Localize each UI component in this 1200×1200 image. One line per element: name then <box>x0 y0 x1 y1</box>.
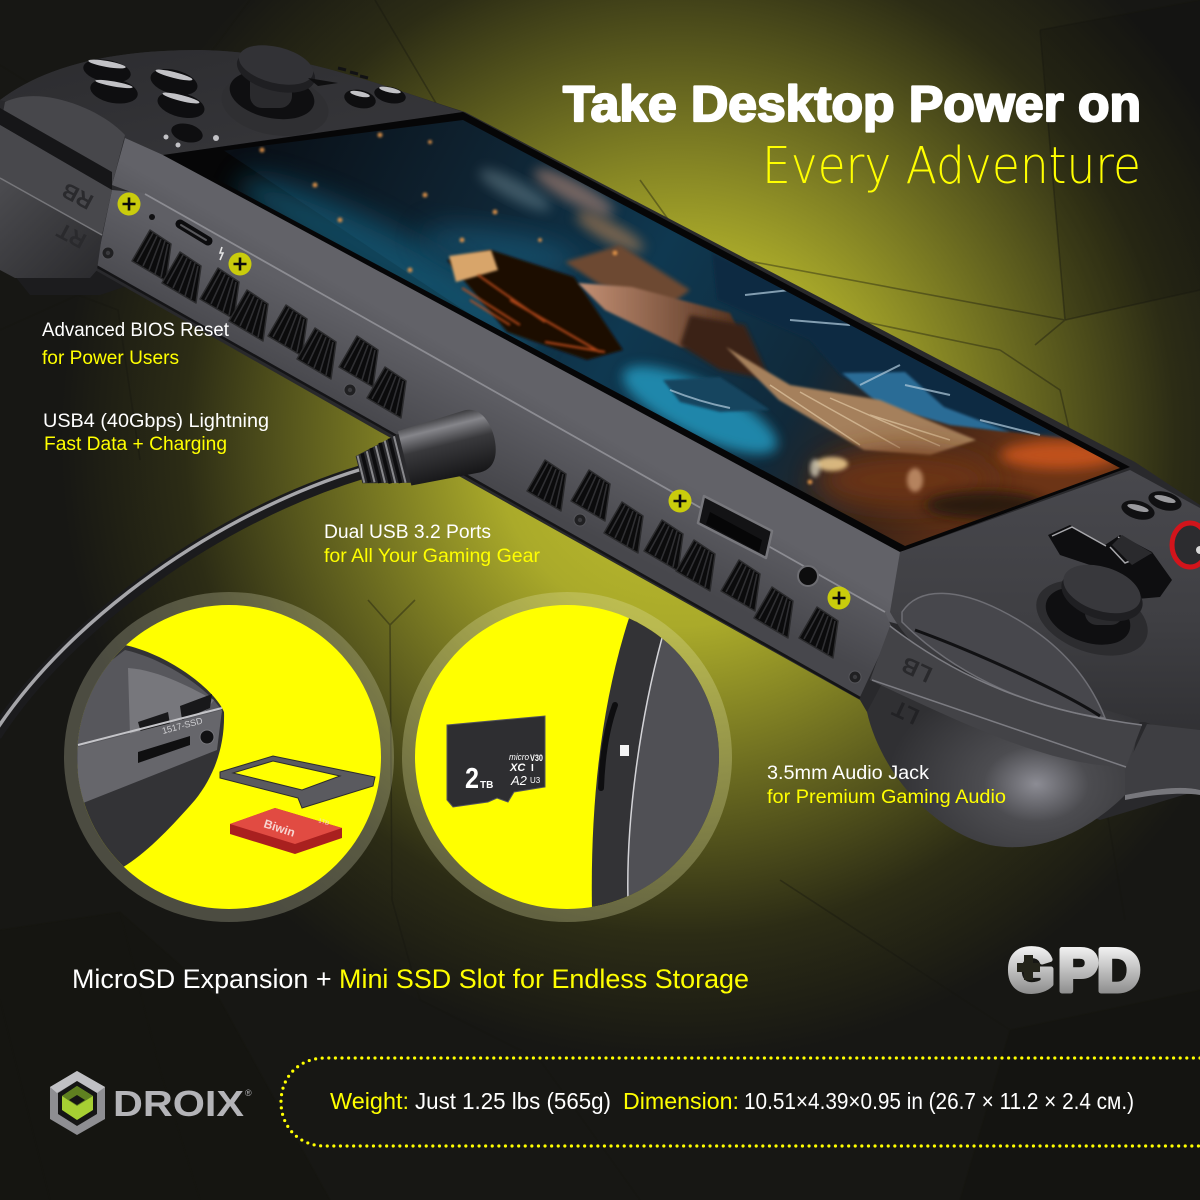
red SSD card: Biwin <box>262 817 297 840</box>
GPD logo <box>1008 937 1140 1004</box>
metal top band <box>112 138 960 640</box>
helmet / dark armour block <box>447 250 623 360</box>
microSD card: micro <box>509 752 529 762</box>
screen bezel <box>163 112 1130 552</box>
label: dual USB <box>324 522 541 567</box>
top face with left grip <box>0 50 463 155</box>
storage headline: MicroSD Expansion + Mini SSD Slot for Endless Storage <box>72 964 749 994</box>
LB bumper bar <box>870 626 1142 767</box>
right grip controls <box>1026 488 1200 670</box>
circle: mini SSD slot <box>60 592 394 922</box>
circle: microSD slot <box>402 592 732 922</box>
spec bar: Just 1.25 lbs (565g) <box>415 1088 611 1114</box>
label: audio jack: for Premium Gaming Audio <box>767 787 1006 808</box>
SSD tray <box>220 756 375 808</box>
microSD card: 2 <box>465 763 479 795</box>
label: dual USB: Dual USB 3.2 Ports <box>324 522 491 543</box>
right trigger and grip: LB <box>897 652 936 688</box>
microSD card: A2 <box>510 773 528 788</box>
left joystick <box>217 66 333 144</box>
DROIX logo: DROIX <box>113 1083 244 1124</box>
DROIX logo <box>50 1071 252 1135</box>
audio jack <box>798 566 818 586</box>
title: Every Adventure <box>762 137 1141 196</box>
label: BIOS reset: Advanced BIOS Reset <box>42 320 230 341</box>
microSD card: TB <box>480 780 493 791</box>
cable and plug <box>0 405 502 735</box>
title: Take Desktop Power on <box>563 76 1141 132</box>
hair top <box>565 245 690 305</box>
microSD card: I <box>531 763 534 774</box>
face <box>578 283 743 347</box>
left grip controls <box>81 38 407 148</box>
screws <box>102 247 861 683</box>
spec bar: Weight: <box>330 1088 409 1114</box>
GPD logo: P <box>1058 937 1098 1004</box>
handheld device <box>0 38 1200 847</box>
long hair <box>726 347 976 455</box>
label: USB4: Fast Data + Charging <box>44 434 227 455</box>
label: dual USB: for All Your Gaming Gear <box>324 546 541 567</box>
GPD logo: G <box>1008 937 1055 1004</box>
right trigger and grip <box>867 470 1200 847</box>
markers <box>118 192 850 610</box>
title <box>563 76 1141 196</box>
microSD card: V30 <box>530 753 543 763</box>
circle: mini SSD slot: 1517-SSD <box>161 715 204 736</box>
DROIX logo: ® <box>245 1088 252 1098</box>
blue armour <box>712 253 1074 440</box>
blurred nebula <box>529 161 619 223</box>
label: audio jack: 3.5mm Audio Jack <box>767 763 930 784</box>
device body outline and lower side strip <box>0 50 1200 820</box>
side panel <box>96 190 892 697</box>
glowing bottom right <box>815 450 995 510</box>
microSD card <box>447 716 545 807</box>
USB-C port and reset pinhole <box>149 214 223 260</box>
spec bar: 10.51×4.39×0.95 in (26.7 × 11.2 × 2.4 см.) <box>744 1088 1134 1114</box>
left shoulder trigger RB/RT: RT <box>52 218 90 254</box>
red SSD card: 1TB <box>317 818 330 827</box>
label: USB4 <box>43 411 269 455</box>
spec bar: Dimension: <box>623 1088 739 1114</box>
vents right group <box>527 460 838 658</box>
screen artwork <box>224 120 1120 546</box>
GPD logo: D <box>1097 937 1140 1004</box>
label: BIOS reset <box>42 320 230 369</box>
label: USB4: USB4 (40Gbps) Lightning <box>43 411 269 432</box>
spec bar <box>281 1058 1200 1146</box>
vents left group <box>132 230 406 418</box>
panel seam lines <box>145 194 885 612</box>
red SSD card <box>230 808 342 854</box>
left shoulder trigger RB/RT <box>0 96 125 278</box>
left trigger underside <box>10 240 130 295</box>
microSD card: XC <box>509 762 526 774</box>
right trigger and grip: LT <box>888 695 923 730</box>
grip recess <box>902 593 1105 718</box>
label: audio jack <box>767 763 1006 808</box>
USB-A port <box>698 496 772 558</box>
label: BIOS reset: for Power Users <box>42 348 179 369</box>
left shoulder trigger RB/RT: RB <box>58 178 97 215</box>
sparks <box>260 132 812 484</box>
microSD card: U3 <box>530 776 541 785</box>
